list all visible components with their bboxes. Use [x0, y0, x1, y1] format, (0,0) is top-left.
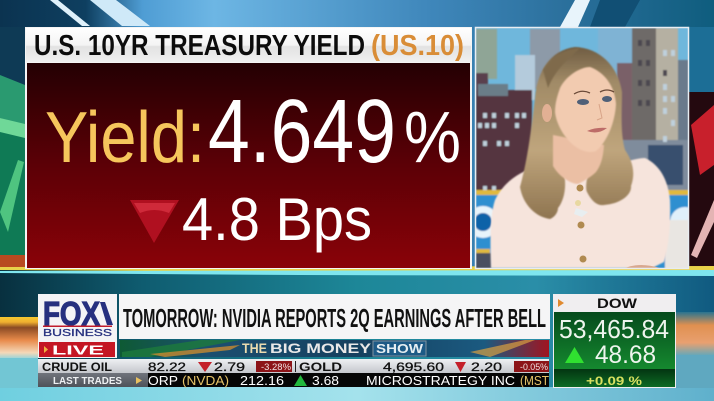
- market ticker: commodities: -0.05%: [520, 362, 548, 372]
- market ticker: last trades: 3.68: [312, 373, 339, 388]
- market ticker: last trades: [38, 373, 549, 388]
- market ticker: commodities: CRUDE OIL: [42, 360, 112, 374]
- Dow value panel: [554, 312, 675, 369]
- market ticker: last trades: LAST TRADES: [53, 375, 122, 387]
- market ticker: last trades: (NVDA): [182, 373, 229, 388]
- live badge: LIVE: [52, 342, 105, 358]
- lower background band: [0, 266, 714, 401]
- market ticker: commodities: -3.28%: [261, 362, 291, 372]
- market ticker: last trades: MICROSTRATEGY INC: [366, 373, 515, 388]
- FOX wordmark: FOX: [43, 295, 100, 332]
- market ticker: commodities: 2.20: [471, 360, 502, 374]
- photo: studio guest: [467, 27, 700, 269]
- Dow percent panel: [554, 369, 675, 387]
- Dow percent change: +0.09 %: [586, 374, 642, 388]
- Dow index value: 53,465.84: [559, 314, 669, 344]
- Dow header arrow: [558, 299, 564, 307]
- skyline: [467, 28, 700, 269]
- icon: fox slashes: [100, 302, 113, 325]
- icon: down triangle: [130, 200, 179, 243]
- hair back: [520, 47, 633, 219]
- neck: [553, 135, 604, 184]
- Dow point change: 48.68: [595, 341, 656, 369]
- headline banner: [119, 294, 550, 339]
- hair crown shadow: [543, 48, 580, 88]
- logo: Fox Business Live: [38, 294, 117, 358]
- market ticker: commodities: GOLD: [299, 360, 342, 374]
- photo frame: [476, 28, 688, 268]
- business wordmark: BUSINESS: [43, 327, 112, 339]
- studio background: [0, 0, 714, 270]
- market ticker: commodities: 2.79: [214, 360, 245, 374]
- guest figure: [490, 47, 670, 268]
- percent sign: %: [404, 98, 461, 178]
- ticker symbol: (US.10): [371, 30, 464, 62]
- panel: treasury yield: [25, 27, 472, 269]
- icon: up triangle: [565, 347, 584, 363]
- yield label: Yield:: [45, 98, 205, 178]
- Dow heading: DOW: [597, 295, 638, 311]
- face: [555, 67, 616, 152]
- market ticker: last trades: (MST: [520, 373, 549, 388]
- eyes and mouth: [574, 90, 614, 132]
- show name bar: BIG MONEY: [270, 340, 372, 356]
- show name bar: [120, 340, 549, 357]
- sweater: [490, 158, 670, 268]
- heading: treasury yield: U.S. 10YR TREASURY YIELD: [34, 30, 365, 62]
- yield value: 4.649: [208, 82, 396, 182]
- show name bar: THE: [242, 340, 267, 356]
- market ticker: commodities: 82.22: [148, 360, 186, 374]
- market ticker: commodities: 4,695.60: [383, 360, 444, 374]
- buttons: [575, 184, 586, 262]
- market ticker: last trades: 212.16: [240, 373, 284, 388]
- ear: [542, 104, 552, 122]
- basis point change: 4.8 Bps: [182, 186, 372, 253]
- market ticker: commodities: [38, 359, 549, 374]
- show name bar: SHOW: [376, 341, 424, 356]
- red value panel: [27, 63, 470, 268]
- market ticker: last trades: ORP: [148, 373, 178, 388]
- panel header: [26, 28, 471, 62]
- panel: Dow index: [553, 294, 676, 388]
